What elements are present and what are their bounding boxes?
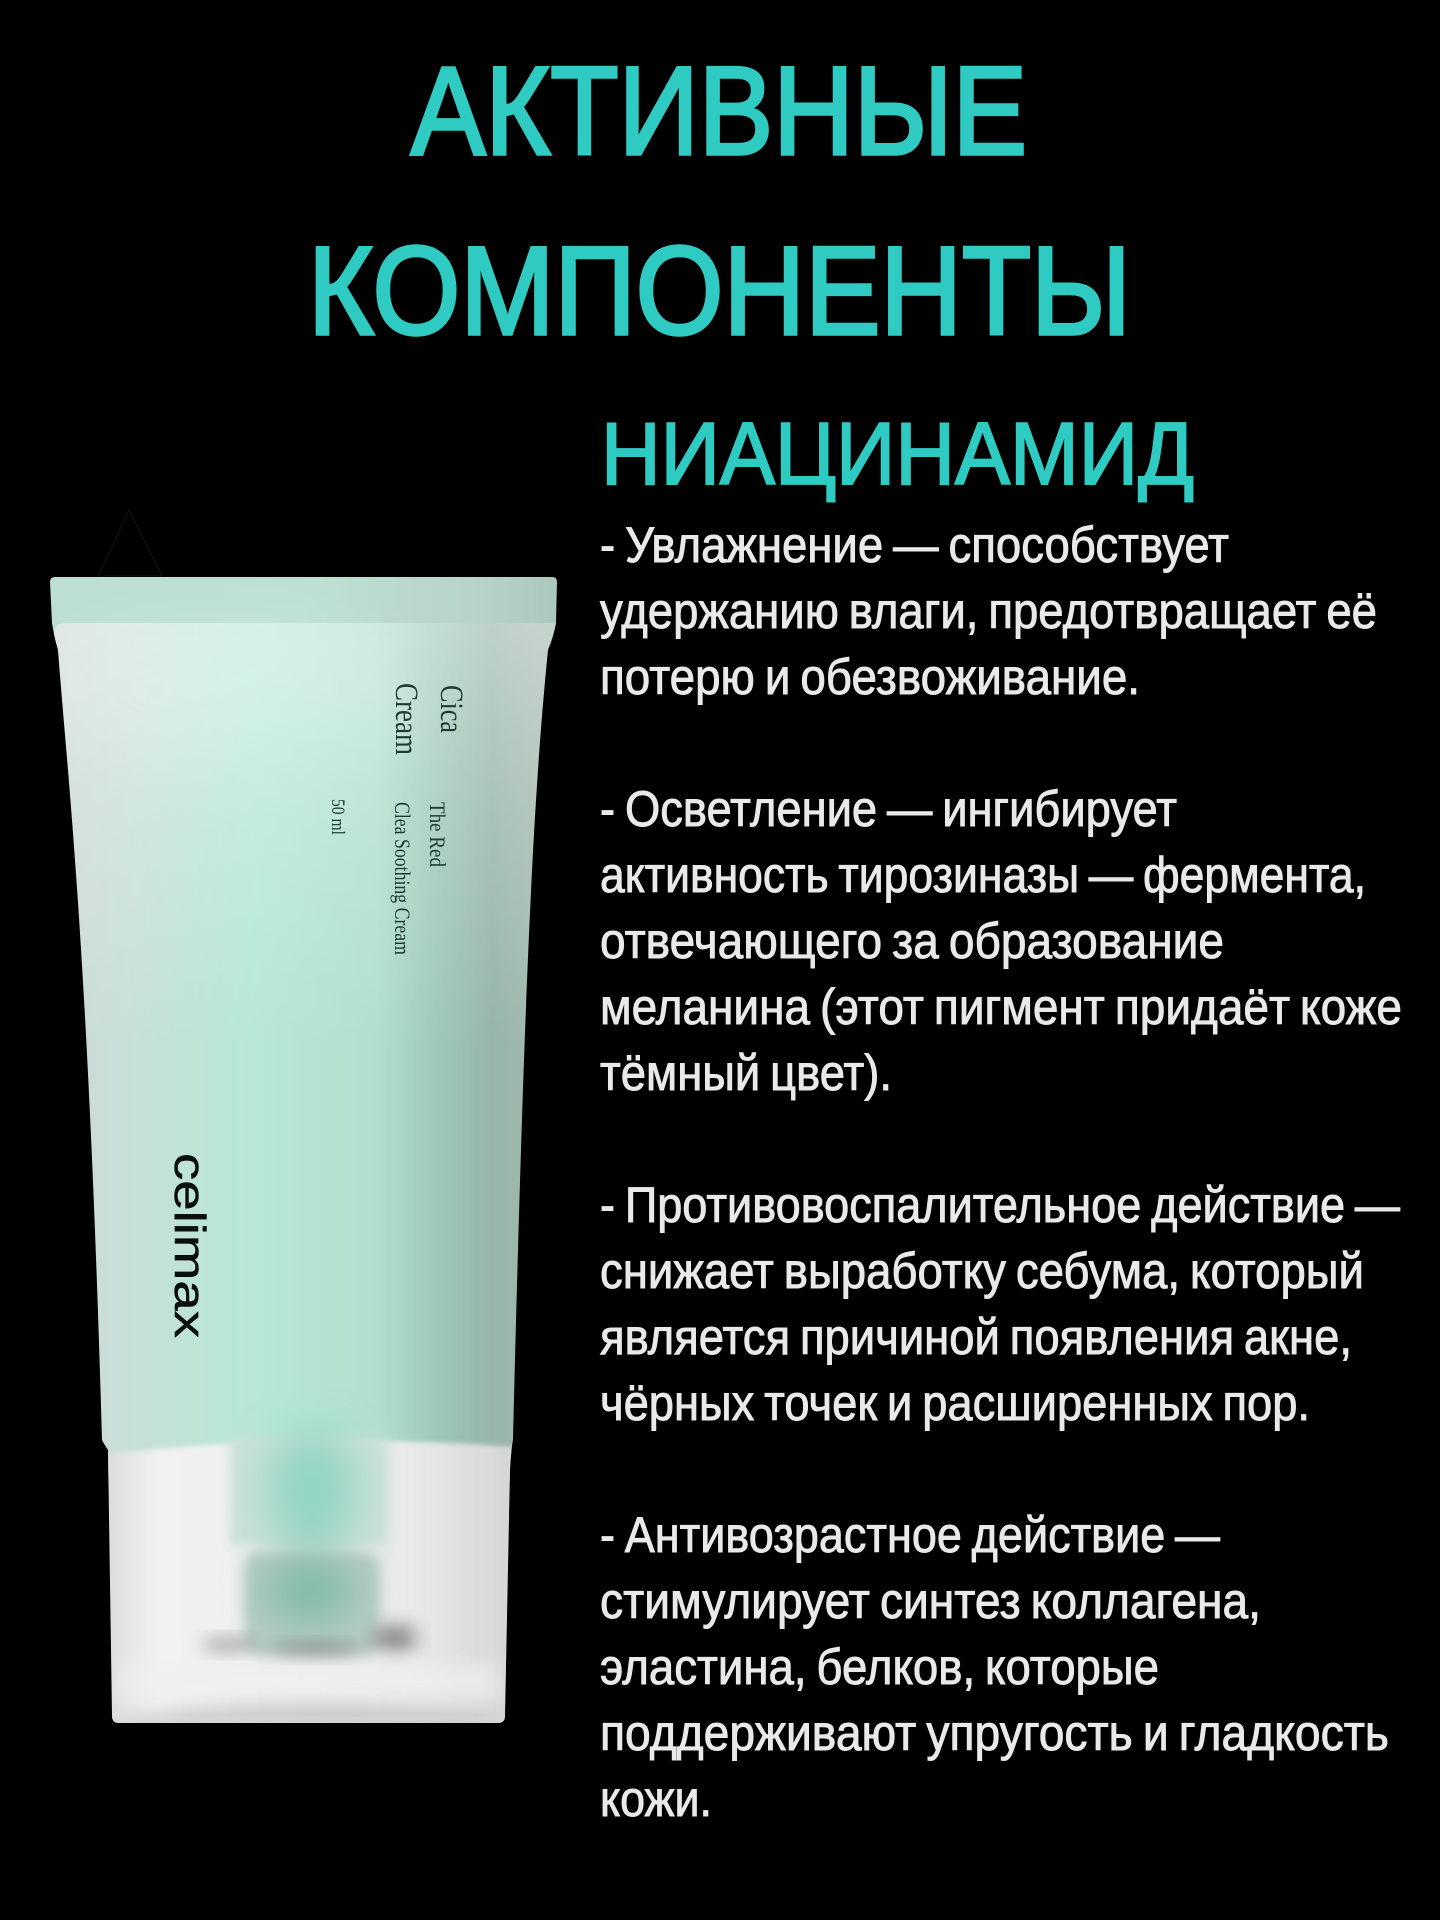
product name: 50 ml: [327, 799, 348, 835]
brand logo: celimax: [165, 1153, 214, 1338]
product name: Cream: [388, 683, 424, 755]
cap nozzle: [244, 1552, 380, 1656]
product cap: [108, 1422, 512, 1723]
text block: anti-aging: - Антивозрастное действие —: [600, 1507, 1220, 1563]
heading: ingredient name: НИАЦИНАМИД: [601, 404, 1194, 503]
cap shadows: [202, 1638, 254, 1652]
text block: anti-aging: кожи.: [600, 1771, 712, 1827]
product tube: [30, 570, 570, 1756]
tube body: [54, 623, 564, 1483]
text block: anti-inflammatory: является причиной появления акне,: [600, 1309, 1352, 1365]
title: [308, 42, 1131, 361]
text block: brightening: [600, 781, 1402, 1101]
product name: Cica: [433, 685, 469, 733]
text block: brightening: - Осветление — ингибирует: [600, 781, 1177, 837]
tube crimp seal: [50, 577, 557, 645]
text block: anti-aging: эластина, белков, которые: [600, 1639, 1159, 1695]
text block: anti-inflammatory: снижает выработку себума, который: [600, 1243, 1364, 1299]
title: КОМПОНЕНТЫ: [308, 222, 1131, 361]
text block: moisturizing: удержанию влаги, предотвращает её: [600, 583, 1377, 639]
text block: moisturizing: - Увлажнение — способствует: [600, 517, 1229, 573]
text block: anti-inflammatory: [600, 1177, 1400, 1431]
tube upper highlight: [54, 623, 556, 946]
product name: The Red: [425, 802, 450, 867]
text block: moisturizing: потерю и обезвоживание.: [600, 649, 1140, 705]
text block: moisturizing: [600, 517, 1377, 705]
text block: anti-aging: [600, 1507, 1389, 1827]
text block: anti-aging: стимулирует синтез коллагена,: [600, 1573, 1261, 1629]
cap neck: [230, 1436, 388, 1546]
text block: brightening: отвечающего за образование: [600, 913, 1224, 969]
title: АКТИВНЫЕ: [411, 42, 1027, 181]
text block: anti-aging: поддерживают упругость и гладкость: [600, 1705, 1389, 1761]
icon: faint triangle above tube: [98, 510, 162, 576]
text block: anti-inflammatory: чёрных точек и расширенных пор.: [600, 1375, 1310, 1431]
cap bottom rim: [284, 1657, 506, 1697]
product name: [327, 683, 469, 955]
text block: brightening: активность тирозиназы — фермента,: [600, 847, 1366, 903]
text block: brightening: тёмный цвет).: [600, 1045, 892, 1101]
product name: Clea Soothing Cream: [390, 802, 415, 955]
